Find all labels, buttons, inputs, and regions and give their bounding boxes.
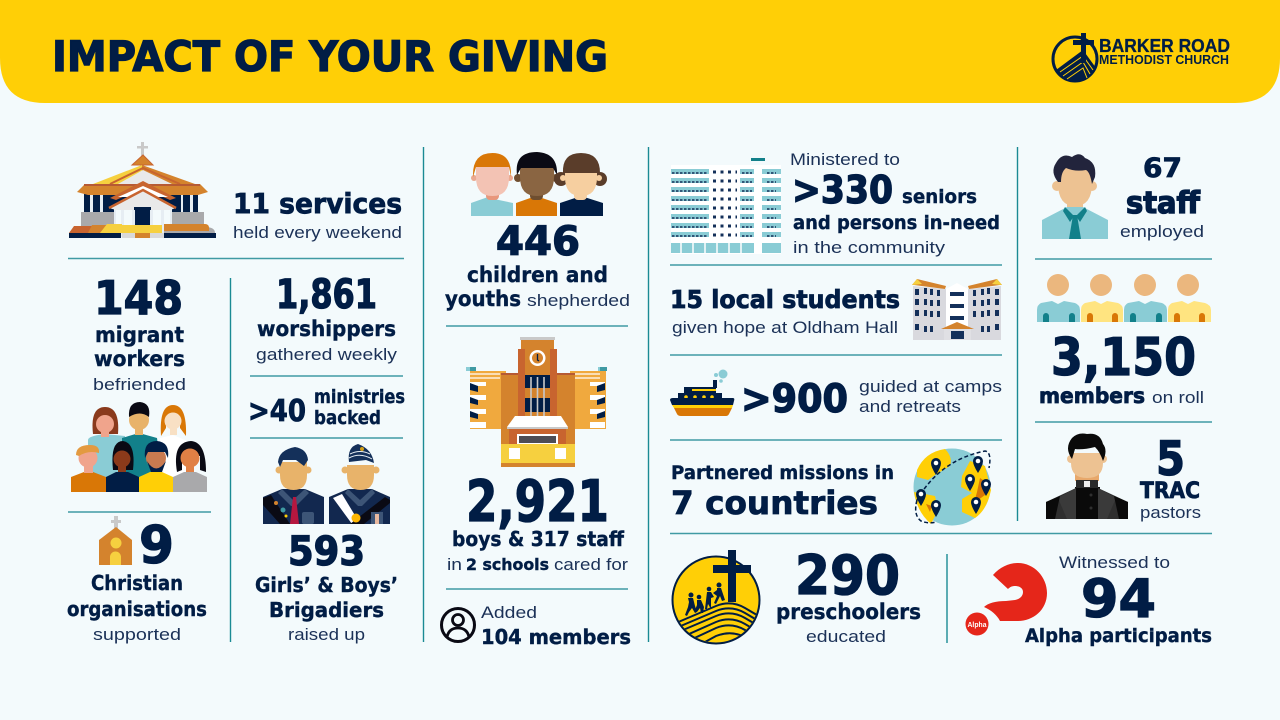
icon: migrant workers group <box>71 402 207 492</box>
stat: 593 brigadiers: Brigadiers <box>269 598 384 622</box>
stat: >900 guided: >900 <box>741 377 848 422</box>
stat: 1,861 worshippers <box>256 272 398 364</box>
icon: staff person <box>1042 154 1108 239</box>
stat: 67 staff <box>1120 153 1204 241</box>
stat: 2,921 boys and staff: cared for <box>554 555 628 574</box>
stat: 5 TRAC pastors: TRAC <box>1140 479 1200 504</box>
stat: added 104 members <box>481 603 631 649</box>
stat: added 104 members: 104 members <box>481 625 631 649</box>
stat: 9 Christian organisations: organisations <box>67 597 207 621</box>
icon: ship <box>670 370 734 416</box>
stat: 15 local students: given hope at Oldham Hall <box>672 318 898 337</box>
stat: 148 migrant workers: migrant <box>95 323 184 347</box>
stat: missions in 7 countries: Partnered missions in <box>671 462 894 484</box>
stat: 3,150 members <box>1039 328 1204 408</box>
stat: missions in 7 countries <box>671 462 894 522</box>
icon: Alpha question mark <box>966 563 1047 636</box>
stat: 3,150 members: 3,150 <box>1051 328 1196 388</box>
stat: >330 seniors: and persons in-need <box>793 212 1000 234</box>
stat: 94 Alpha participants: Witnessed to <box>1059 553 1170 572</box>
stat: 148 migrant workers <box>93 271 186 394</box>
stat: 1,861 worshippers: 1,861 <box>276 272 377 318</box>
stat: 11 services: 11 services <box>233 187 402 220</box>
stat: 67 staff: staff <box>1126 186 1201 221</box>
stat: 290 preschoolers <box>776 544 921 646</box>
stat: 3,150 members: members <box>1039 384 1145 408</box>
stat: >330 seniors: >330 <box>792 168 893 212</box>
stat: 290 preschoolers: educated <box>806 627 886 646</box>
stat: 9 Christian organisations: Christian <box>91 571 183 595</box>
logo: Barker Road Methodist Church: BARKER ROAD <box>1099 36 1230 56</box>
stat: >900 guided: guided at camps <box>859 377 1002 396</box>
stat: 1,861 worshippers: worshippers <box>257 317 396 341</box>
stat: 290 preschoolers: preschoolers <box>776 600 921 624</box>
stat: 9 Christian organisations: 9 <box>139 516 174 576</box>
icon: church building <box>69 142 216 238</box>
icon: small chapel <box>99 516 132 565</box>
stat: >900 guided <box>741 377 1002 422</box>
stat: 5 TRAC pastors: 5 <box>1156 432 1185 487</box>
logo: Barker Road Methodist Church: METHODIST CHURCH <box>1099 52 1229 67</box>
stat: 148 migrant workers: 148 <box>94 271 183 325</box>
stat: 1,861 worshippers: gathered weekly <box>256 345 398 364</box>
stat: 2,921 boys and staff: in <box>447 555 462 574</box>
stat: 593 brigadiers: 593 <box>288 529 365 575</box>
icon: Alpha question mark: Alpha <box>968 622 987 629</box>
stat: 446 children and youths: children and <box>467 263 608 287</box>
stat: 446 children and youths: youths <box>445 287 521 311</box>
stat: 94 Alpha participants <box>1025 553 1212 647</box>
icon: member person in circle <box>442 608 474 642</box>
icon: globe with pins <box>914 448 991 526</box>
stat: 67 staff: employed <box>1120 222 1204 241</box>
stat: 2,921 boys and staff: 2,921 <box>466 469 609 535</box>
stat: >330 seniors: Ministered to <box>790 150 900 169</box>
stat: 67 staff: 67 <box>1143 153 1182 184</box>
stat: 290 preschoolers: 290 <box>795 544 900 607</box>
stat: >330 seniors: in the community <box>793 238 946 257</box>
stat: 446 children and youths <box>445 219 630 311</box>
icon: Oldham Hall building <box>912 279 1002 340</box>
stat: >40 ministries <box>248 386 405 429</box>
stat: 148 migrant workers: workers <box>94 347 185 371</box>
stat: >330 seniors: seniors <box>902 186 977 208</box>
stat: added 104 members: Added <box>481 603 537 622</box>
title: IMPACT OF YOUR GIVING <box>52 32 608 81</box>
stat: >40 ministries: backed <box>314 407 381 429</box>
icon: pastor <box>1046 434 1128 519</box>
icon: brigadiers <box>263 444 390 524</box>
stat: 9 Christian organisations <box>67 516 207 644</box>
stat: 5 TRAC pastors: pastors <box>1140 503 1201 522</box>
icon: three children <box>471 152 607 216</box>
stat: 9 Christian organisations: supported <box>93 625 181 644</box>
icon: apartment block <box>671 158 781 254</box>
stat: 593 brigadiers: Girls’ & Boys’ <box>255 573 398 597</box>
icon: preschool logo <box>672 550 762 648</box>
stat: >40 ministries: >40 <box>248 394 306 429</box>
stat: 2,921 boys and staff <box>447 469 628 574</box>
stat: 5 TRAC pastors <box>1140 432 1201 522</box>
divider lines <box>68 147 1212 643</box>
stat: >330 seniors <box>790 150 1000 257</box>
stat: >40 ministries: ministries <box>314 386 405 408</box>
stat: 11 services <box>233 187 402 242</box>
stat: 3,150 members: on roll <box>1152 388 1204 407</box>
stat: 593 brigadiers <box>255 529 398 644</box>
stat: 15 local students: 15 local students <box>670 285 900 314</box>
stat: 2,921 boys and staff: 2 schools <box>466 555 549 574</box>
stat: 94 Alpha participants: 94 <box>1081 569 1156 630</box>
logo: Barker Road Methodist Church <box>1053 33 1230 82</box>
stat: 446 children and youths: 446 <box>496 219 580 265</box>
stat: 2,921 boys and staff: boys & 317 staff <box>452 527 625 551</box>
stat: 446 children and youths: shepherded <box>527 291 630 310</box>
icon: school building <box>466 337 607 467</box>
stat: 11 services: held every weekend <box>233 223 402 242</box>
stat: 94 Alpha participants: Alpha participants <box>1025 625 1212 647</box>
stat: >900 guided: and retreats <box>859 397 961 416</box>
stat: 15 local students <box>670 285 900 337</box>
header banner <box>0 0 1280 103</box>
stat: 593 brigadiers: raised up <box>288 625 365 644</box>
stat: 148 migrant workers: befriended <box>93 375 186 394</box>
stat: missions in 7 countries: 7 countries <box>671 484 878 522</box>
icon: four members <box>1037 274 1211 322</box>
